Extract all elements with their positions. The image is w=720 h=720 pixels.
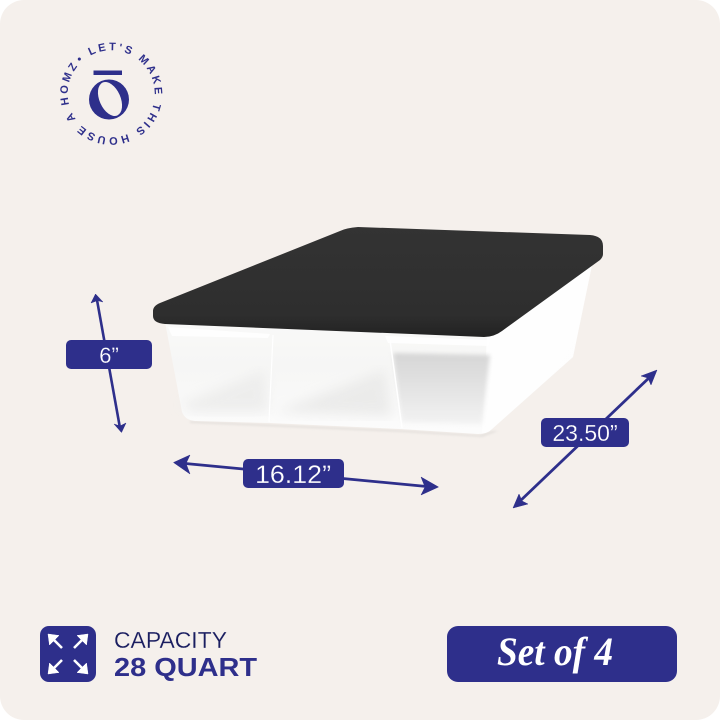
bin shadow xyxy=(190,421,498,437)
capacity text: CAPACITY xyxy=(114,627,227,653)
bin right side xyxy=(482,265,592,433)
bin body xyxy=(165,265,592,434)
storage bin xyxy=(153,227,603,437)
capacity icon xyxy=(40,626,96,682)
height arrow xyxy=(91,294,126,432)
set of 4 badge xyxy=(447,626,677,682)
dimension: height: 6” xyxy=(99,343,119,368)
capacity text: 28 QUART xyxy=(114,652,257,682)
capacity text xyxy=(114,627,257,682)
depth arrow xyxy=(513,370,657,508)
dimension: depth: 23.50” xyxy=(552,420,618,446)
set of 4 badge: Set of 4 xyxy=(497,629,613,674)
dimension: width: 16.12” xyxy=(255,461,331,489)
dimension: depth xyxy=(513,370,657,508)
logo badge xyxy=(60,42,162,145)
bin shadow reflections xyxy=(393,353,490,424)
depth label xyxy=(541,418,629,447)
bin lid xyxy=(153,227,603,337)
dimension: height xyxy=(66,294,152,432)
width label xyxy=(243,459,344,488)
width arrow xyxy=(174,455,438,495)
height label xyxy=(66,340,152,369)
dimension: width xyxy=(174,455,438,495)
logo mark xyxy=(89,70,129,120)
circular slogan: • LET'S MAKE THIS HOUSE A HOMZ xyxy=(60,42,162,145)
